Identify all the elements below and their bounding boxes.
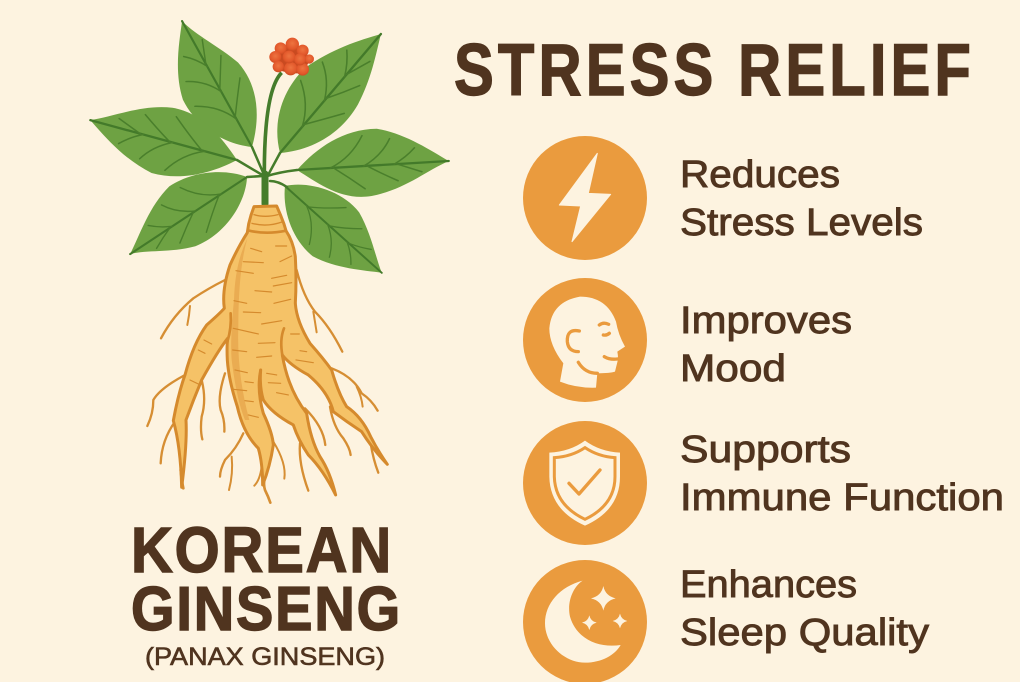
leaf: right [295, 124, 451, 201]
benefit text: Mood [680, 348, 786, 390]
heading line: KOREAN: KOREAN [131, 514, 393, 586]
berry cluster and stalk [264, 38, 314, 173]
subtitle: Panax Ginseng: (PANAX GINSENG) [145, 643, 385, 671]
leaves and stems [81, 6, 451, 298]
leaf: lower left [111, 148, 264, 280]
crotch folds [227, 313, 284, 398]
root shading [231, 238, 249, 420]
illustration: ginseng plant [81, 6, 451, 503]
icon: shield with check [523, 421, 647, 545]
benefit: supports immune function [523, 421, 1004, 545]
icon: lightning bolt [523, 136, 647, 260]
benefit text [680, 300, 852, 390]
benefit text: Reduces [680, 154, 840, 196]
title: Korean Ginseng [131, 514, 402, 671]
benefit text: Sleep Quality [680, 612, 929, 654]
benefit: reduces stress levels [523, 136, 923, 260]
benefit text: Supports [680, 429, 851, 471]
leaf: left [81, 88, 246, 194]
benefit text [680, 154, 923, 244]
root body [173, 206, 387, 495]
benefit text: Enhances [680, 564, 857, 606]
benefit text [680, 429, 1004, 519]
leaf: lower right [262, 163, 402, 298]
leaf: top right [252, 11, 404, 172]
icon: moon and stars [523, 560, 647, 682]
benefit text [680, 564, 929, 654]
leaf: top left [149, 6, 279, 165]
heading line: GINSENG: GINSENG [131, 575, 402, 644]
icon: calm face profile [523, 278, 647, 402]
neck rings and skin lines [190, 215, 313, 417]
fine rootlets [147, 270, 378, 503]
benefit: enhances sleep quality [523, 560, 929, 682]
benefit text: Improves [680, 300, 852, 342]
ginseng root [147, 206, 387, 503]
stems [237, 147, 297, 204]
benefit text: Immune Function [680, 477, 1004, 519]
benefit: improves mood [523, 278, 852, 402]
benefit text: Stress Levels [680, 202, 923, 244]
